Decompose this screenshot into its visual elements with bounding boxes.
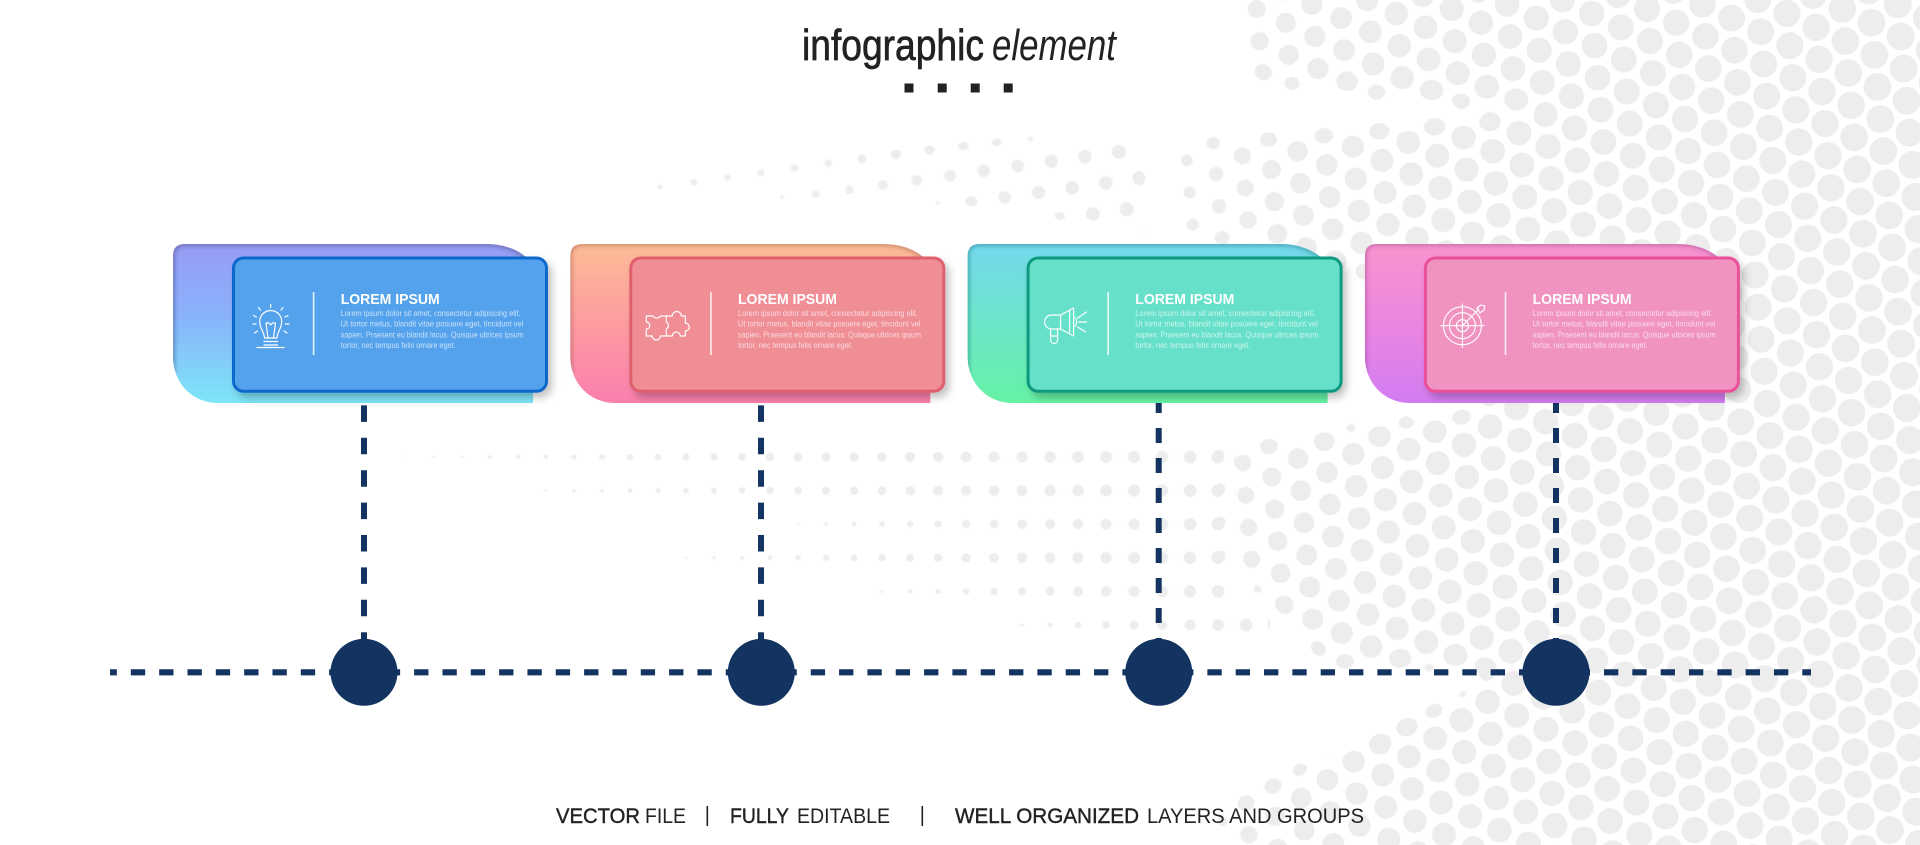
card 4 back shape bbox=[1365, 244, 1725, 403]
card 3 text block: LOREM IPSUM bbox=[1135, 291, 1234, 308]
footer caption: VECTOR bbox=[556, 805, 640, 828]
timeline dashed axis bbox=[110, 669, 1811, 675]
card 1 text block: Ut tortor metus, blandit vitae posuere eget, tincidunt vel bbox=[341, 319, 523, 329]
divider bbox=[710, 292, 712, 355]
icon: megaphone bbox=[1045, 308, 1087, 344]
card 2 front panel bbox=[631, 258, 944, 391]
card 4 text block bbox=[1533, 291, 1716, 350]
card 1 back shape bbox=[173, 244, 533, 403]
card 2 text block: LOREM IPSUM bbox=[738, 291, 837, 308]
footer caption bbox=[556, 805, 1364, 828]
card 3 text block: Lorem ipsum dolor sit amet, consectetur adipiscing elit. bbox=[1135, 308, 1315, 318]
card 3 text block bbox=[1135, 291, 1318, 350]
icon: puzzle pieces bbox=[646, 312, 689, 340]
footer caption: FULLY bbox=[730, 805, 789, 828]
title bbox=[802, 21, 1117, 70]
card 1 text block: sapien. Praesent eu blandit lacus. Quisque ultrices ipsum bbox=[341, 330, 524, 340]
connector 1 bbox=[361, 405, 367, 650]
card 4 front panel bbox=[1425, 258, 1738, 391]
halftone dot background bbox=[406, 0, 1920, 845]
footer caption: FILE bbox=[645, 805, 686, 828]
card 3 text block: Ut tortor metus, blandit vitae posuere eget, tincidunt vel bbox=[1135, 319, 1318, 329]
divider bbox=[313, 292, 314, 355]
card 4 text block: sapien. Praesent eu blandit lacus. Quisque ultrices ipsum bbox=[1533, 330, 1716, 340]
timeline node 2 bbox=[728, 639, 795, 706]
footer caption: EDITABLE bbox=[797, 805, 890, 828]
card 1 text block: LOREM IPSUM bbox=[341, 291, 440, 308]
timeline node 1 bbox=[330, 639, 398, 706]
panel: card 4 pink bbox=[1365, 244, 1738, 403]
connector 4 bbox=[1553, 398, 1559, 650]
connector 3 bbox=[1156, 398, 1162, 650]
title dots bbox=[904, 84, 1013, 92]
panel: card 2 coral bbox=[570, 244, 944, 403]
footer caption: LAYERS AND GROUPS bbox=[1147, 805, 1364, 828]
card 3 text block: tortor, nec tempus felis ornare eget. bbox=[1135, 340, 1250, 350]
card 1 front panel bbox=[234, 258, 546, 391]
connector 2 bbox=[758, 405, 764, 650]
card 2 back shape bbox=[570, 244, 930, 403]
divider bbox=[1505, 292, 1506, 355]
panel: card 3 green bbox=[968, 244, 1341, 403]
timeline node 4 bbox=[1522, 639, 1590, 706]
card 2 text block bbox=[738, 291, 921, 350]
title: infographic bbox=[802, 21, 984, 70]
card 3 text block: sapien. Praesent eu blandit lacus. Quisque ultrices ipsum bbox=[1135, 330, 1318, 340]
card 4 text block: tortor, nec tempus felis ornare eget. bbox=[1533, 340, 1648, 350]
card 2 text block: tortor, nec tempus felis ornare eget. bbox=[738, 340, 853, 350]
icon: target with arrow bbox=[1441, 304, 1485, 348]
card 3 front panel bbox=[1028, 258, 1341, 391]
card 2 text block: Lorem ipsum dolor sit amet, consectetur adipiscing elit. bbox=[738, 308, 918, 318]
card 1 text block: tortor, nec tempus felis ornare eget. bbox=[341, 340, 456, 350]
timeline node 3 bbox=[1125, 639, 1192, 706]
title: element bbox=[992, 21, 1117, 70]
card 2 text block: sapien. Praesent eu blandit lacus. Quisque ultrices ipsum bbox=[738, 330, 921, 340]
card 1 text block bbox=[341, 291, 524, 350]
card 1 text block: Lorem ipsum dolor sit amet, consectetur adipiscing elit. bbox=[341, 308, 521, 318]
card 4 text block: LOREM IPSUM bbox=[1533, 291, 1632, 308]
divider bbox=[1107, 292, 1109, 355]
icon: light bulb bbox=[253, 304, 289, 348]
card 4 text block: Lorem ipsum dolor sit amet, consectetur adipiscing elit. bbox=[1533, 308, 1713, 318]
card 2 text block: Ut tortor metus, blandit vitae posuere eget, tincidunt vel bbox=[738, 319, 921, 329]
card 4 text block: Ut tortor metus, blandit vitae posuere eget, tincidunt vel bbox=[1533, 319, 1715, 329]
footer caption: WELL ORGANIZED bbox=[955, 805, 1139, 828]
card 3 back shape bbox=[968, 244, 1328, 403]
panel: card 1 blue bbox=[173, 244, 546, 403]
